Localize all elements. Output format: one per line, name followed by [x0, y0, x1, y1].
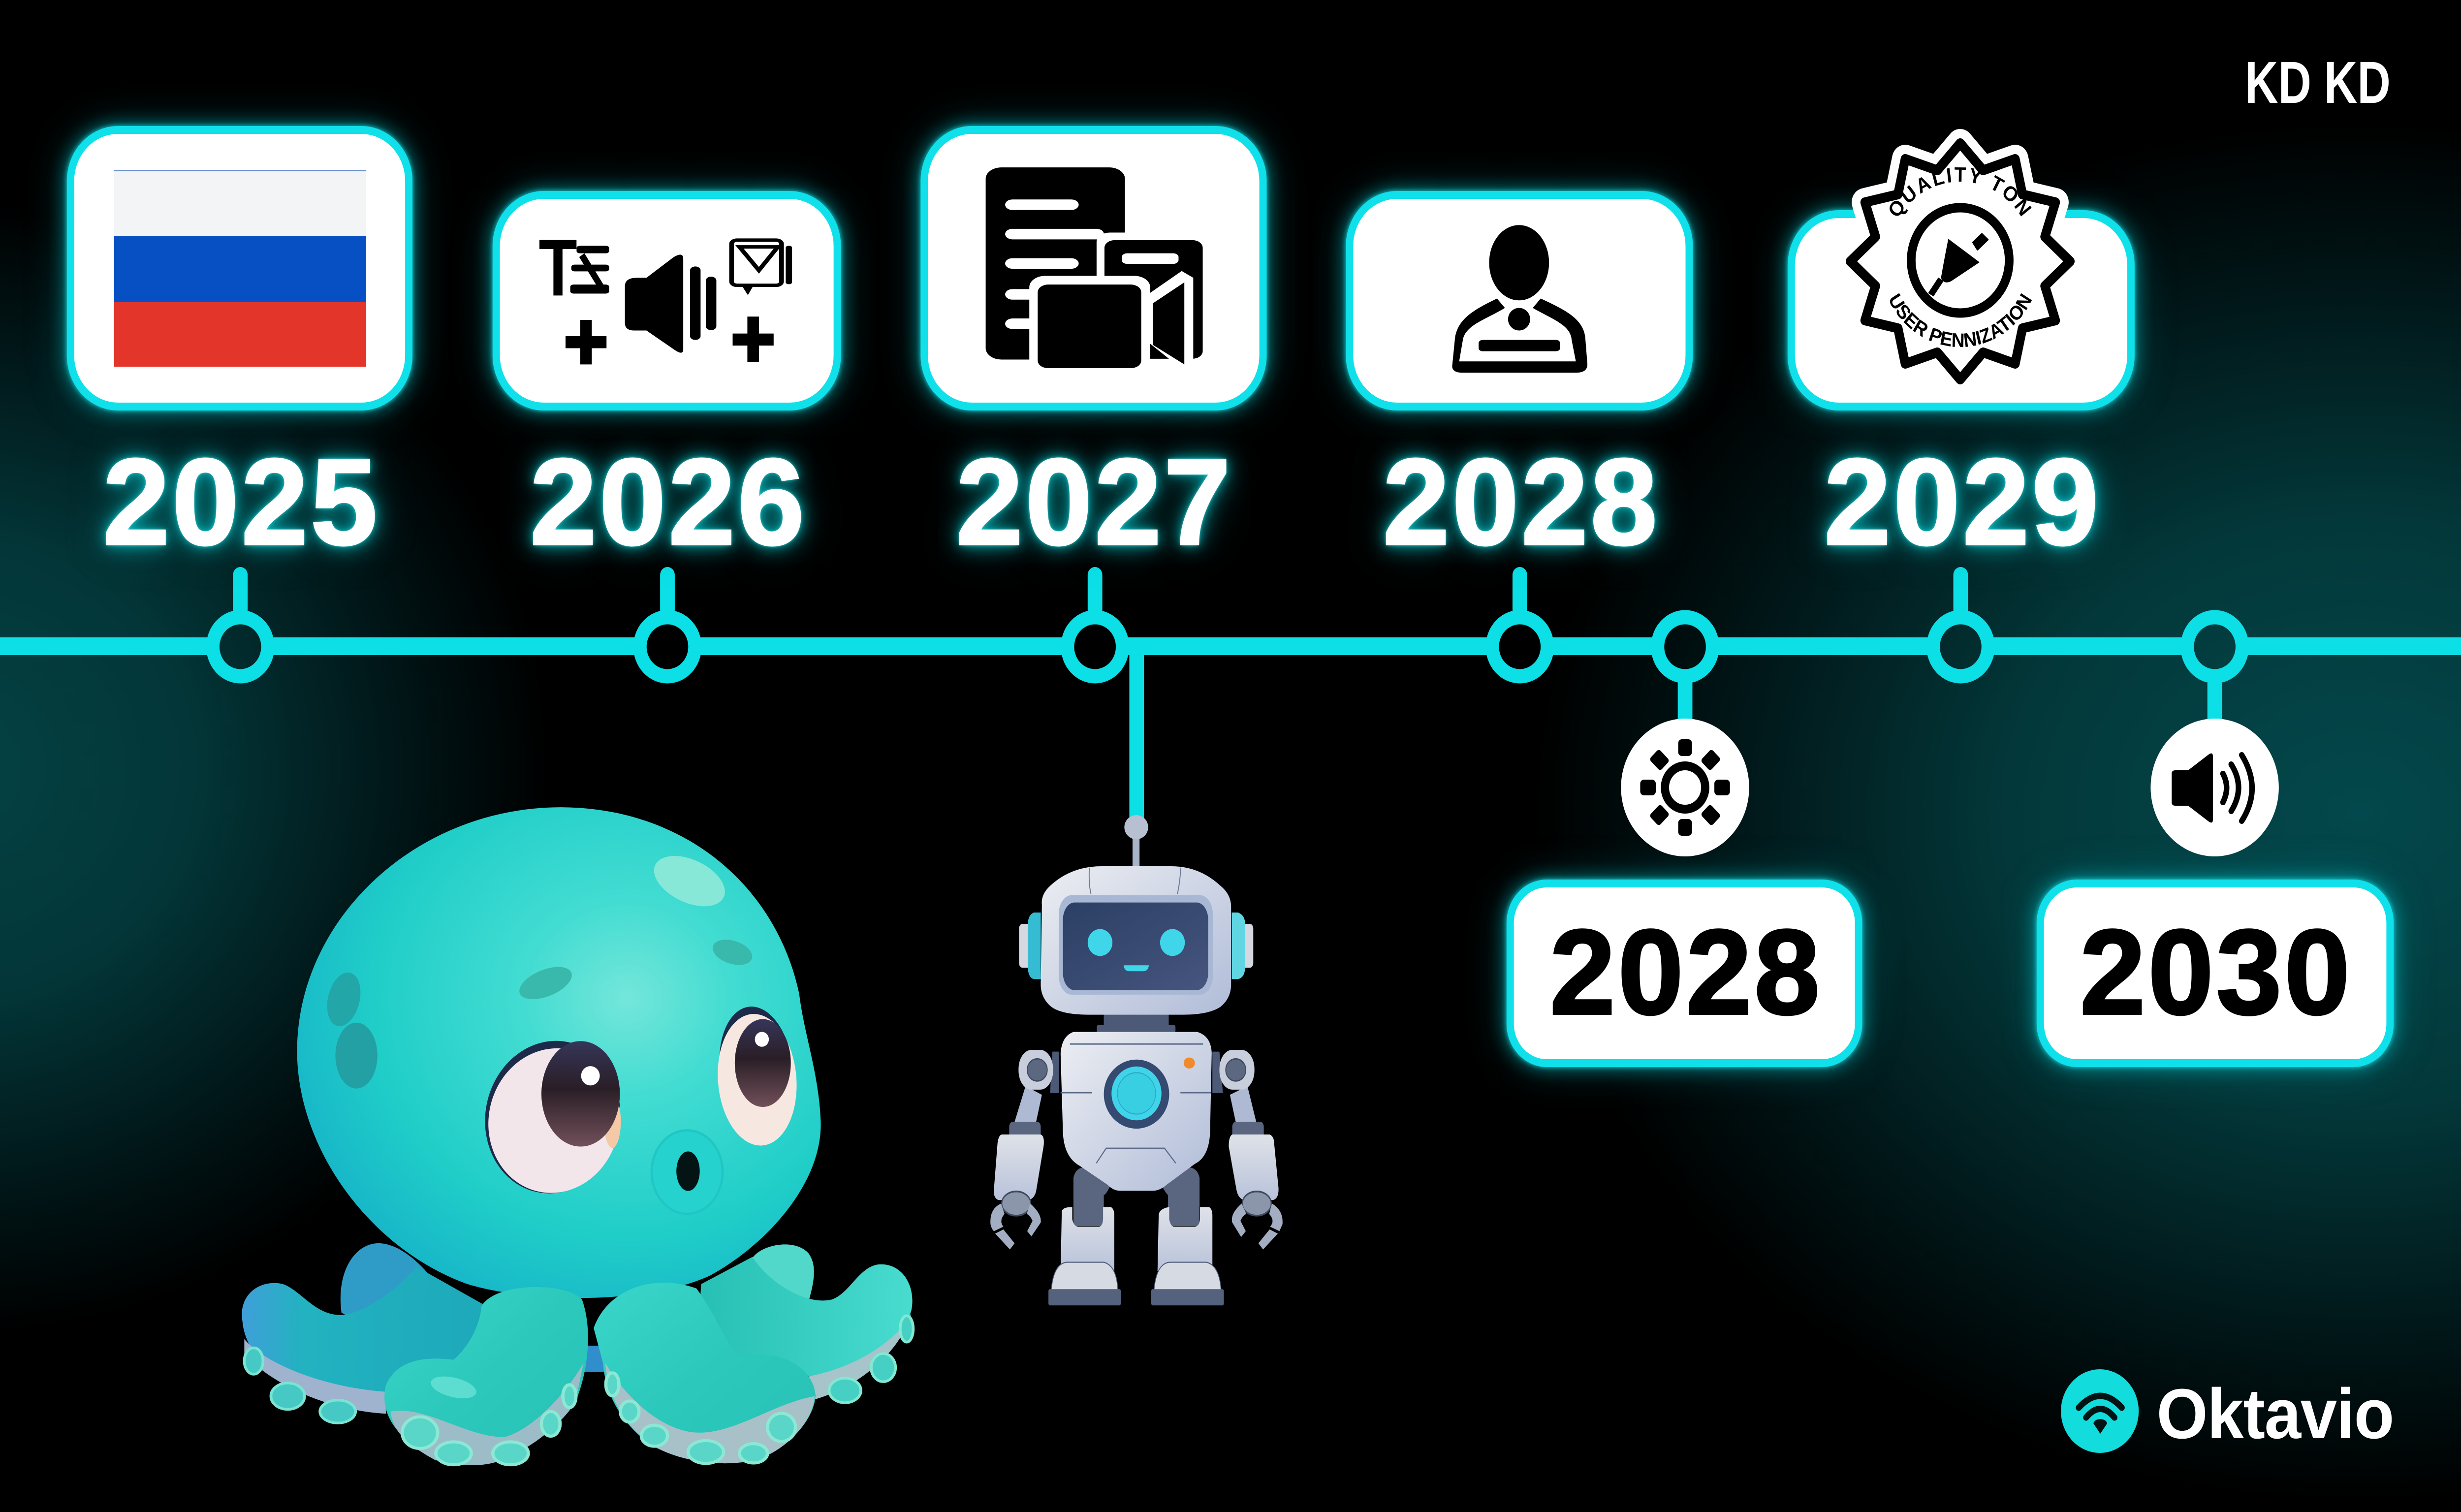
year 2028: 2028 [1383, 433, 1660, 570]
icon: document and video [986, 167, 1207, 373]
left tentacle [242, 1266, 486, 1423]
icon: quality badge: QUALITY TON [1890, 167, 2032, 217]
face [1088, 929, 1185, 971]
head [297, 807, 821, 1298]
card: 2028 lower [1507, 880, 1862, 1067]
front left tentacle [384, 1287, 588, 1465]
icon: speaker in white circle [2150, 719, 2279, 856]
status light [1184, 1058, 1195, 1069]
legs [1048, 1167, 1224, 1305]
year 2026: 2026 [530, 433, 807, 570]
head [1041, 866, 1231, 1015]
right eye [713, 1003, 801, 1148]
octopus mascot [242, 807, 913, 1465]
left arm [990, 1050, 1059, 1250]
icon: sun in white circle [1621, 719, 1749, 856]
card: 2028 upper [1346, 191, 1693, 410]
icon: person [1452, 225, 1587, 373]
front right tentacle [594, 1283, 816, 1463]
icon: quality badge [1846, 129, 2075, 384]
head spots [322, 846, 756, 1089]
icon: Russian flag [114, 170, 366, 367]
torso [1061, 1032, 1212, 1191]
card: 2026 [493, 191, 841, 410]
chest light [1104, 1060, 1169, 1129]
card: 2030 [2037, 880, 2394, 1067]
card: 2027 [920, 126, 1266, 410]
mouth [652, 1130, 723, 1214]
right tentacle [696, 1257, 913, 1403]
neck [1097, 1012, 1175, 1033]
icon: text audio message: T [539, 223, 577, 313]
ears [1019, 913, 1253, 979]
icon: text audio message [539, 223, 792, 364]
left eye [474, 1033, 631, 1201]
year 2029: 2029 [1824, 433, 2101, 570]
brand: Oktavio: Oktavio [2157, 1374, 2394, 1453]
year 2027: 2027 [956, 433, 1233, 570]
right arm [1212, 1050, 1283, 1250]
card: 2029 [1788, 210, 2135, 410]
logo icon [2061, 1369, 2139, 1453]
icon: quality badge: USER PENNIZATION [1890, 293, 2032, 347]
robot mascot [990, 815, 1283, 1305]
label: KD KD: KD KD [2245, 49, 2391, 116]
card: 2025 [67, 126, 412, 410]
year 2028 lower: 2028 [1549, 905, 1822, 1040]
year 2030: 2030 [2080, 905, 2352, 1040]
back tentacles [341, 1243, 814, 1372]
antenna [1124, 815, 1148, 867]
year 2025: 2025 [103, 433, 379, 570]
